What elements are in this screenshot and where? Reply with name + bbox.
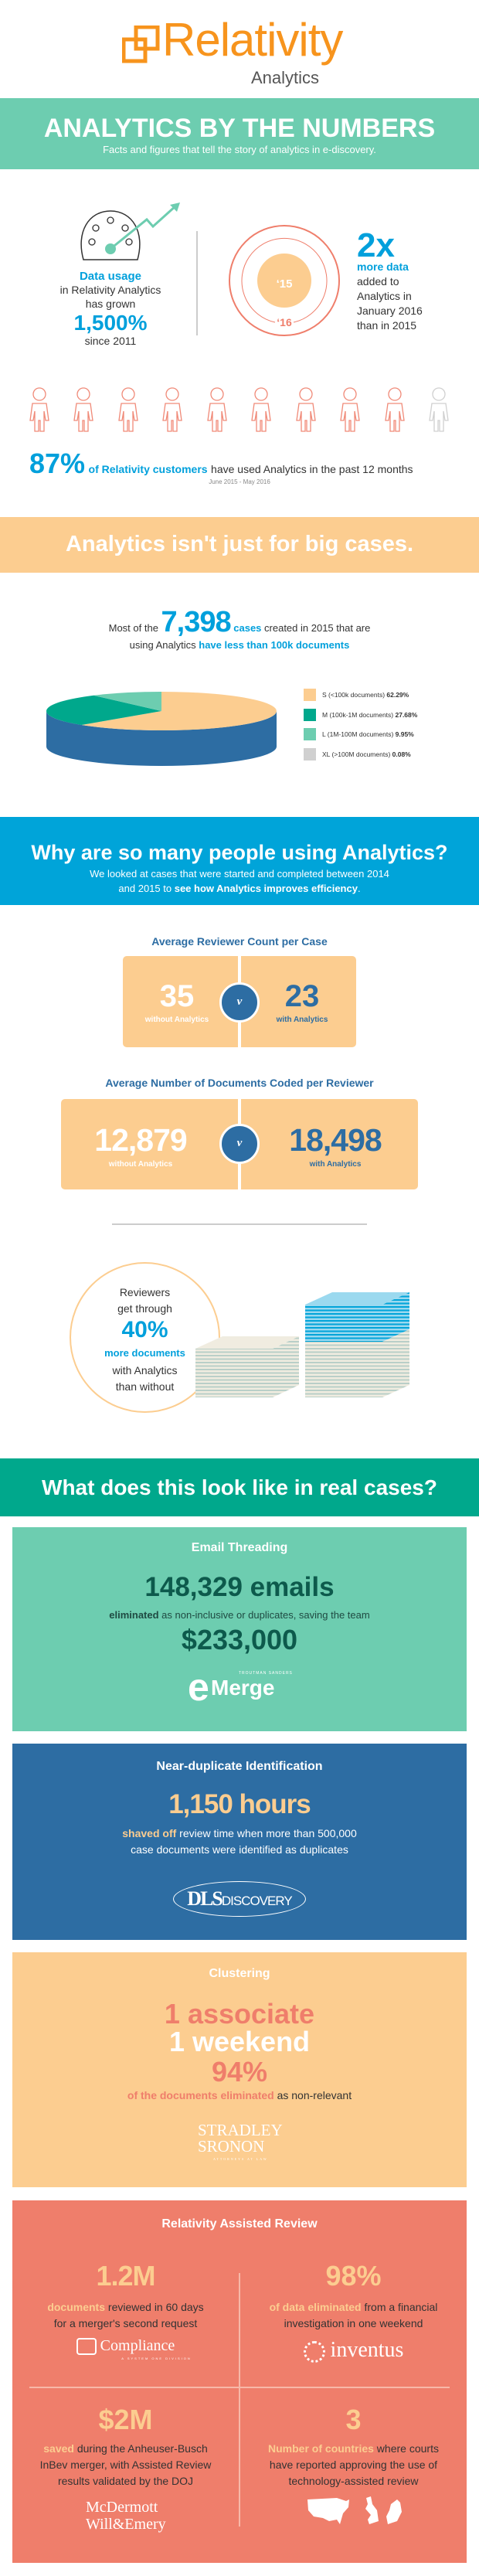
- panel: near-duplicate identification: Near-duplicate Identification: [156, 1760, 323, 1773]
- panel: near-duplicate identification: case documents were identified as duplicates: [131, 1843, 348, 1856]
- logo: Relativity Analytics: Relativity: [162, 14, 342, 66]
- logo: DLS Discovery: [173, 1881, 306, 1917]
- icon: document stacks: [195, 1292, 409, 1397]
- logo: Stradley Ronon: ATTORNEYS AT LAW: [213, 2157, 268, 2161]
- callout: reviewers get through 40% more: [70, 1262, 220, 1413]
- callout: reviewers get through 40% more: with Analytics: [112, 1364, 178, 1376]
- icon: country maps US UK Ireland: [307, 2496, 402, 2524]
- stat: $2M saved: InBev merger, with Assisted Review: [40, 2459, 211, 2471]
- stat: $2M saved: results validated by the DOJ: [58, 2475, 193, 2487]
- logo: DLS Discovery: DLSDISCOVERY: [187, 1887, 292, 1910]
- text: data usage grown 1,500%: since 2011: [85, 335, 136, 347]
- logo: eMerge: [188, 1666, 293, 1709]
- logo: McDermott Will & Emery: Will&Emery: [86, 2516, 166, 2533]
- icon: data circles '15 '16: ‘16: [277, 316, 292, 328]
- stat: 3 countries: [268, 2404, 439, 2524]
- banner: Analytics by the numbers: [0, 98, 479, 169]
- banner: Analytics isn't just for big cases: [0, 517, 479, 573]
- panel: documents coded comparison: with Analytics: [310, 1160, 361, 1169]
- panel: email threading: 148,329 emails: [144, 1572, 335, 1602]
- banner: Why are so many people using Analytics: [0, 817, 479, 905]
- panel: clustering: Clustering: [209, 1967, 270, 1980]
- panel: documents coded comparison: without Analytics: [109, 1160, 172, 1169]
- text: data usage grown 1,500%: has grown: [86, 298, 135, 310]
- logo: Compliance: Compliance: [100, 2337, 175, 2354]
- legend: pie: S (<100k documents) 62.29%: [322, 691, 409, 699]
- stat: 98% data eliminated: investigation in one weekend: [284, 2317, 423, 2329]
- callout: reviewers get through 40% more: than without: [116, 1380, 174, 1393]
- panel: documents coded comparison: 18,498: [289, 1122, 382, 1158]
- panel: reviewer count comparison: 35: [160, 979, 194, 1013]
- stat: 98% data eliminated: [270, 2260, 437, 2363]
- callout: reviewers get through 40% more: get through: [117, 1302, 172, 1315]
- text: data usage grown 1,500%: Data usage: [80, 270, 141, 283]
- banner: Why are so many people using Analytics: We looked at cases that were started and completed between 2014: [90, 868, 389, 880]
- banner: Why are so many people using Analytics: and 2015 to see how Analytics improves efficiency.: [118, 883, 361, 894]
- logo: Stradley Ronon: [198, 2121, 283, 2161]
- icon: versus circle: [219, 982, 260, 1023]
- text: 2x more data: [357, 226, 423, 332]
- stat: 3 countries: technology-assisted review: [288, 2475, 419, 2487]
- icon: logo squares: [122, 26, 159, 63]
- panel: clustering: 1 associate: [165, 1998, 314, 2030]
- stat: 3 countries: Number of countries where courts: [268, 2442, 439, 2455]
- note: date range: June 2015 - May 2016: [209, 478, 270, 485]
- stat: $2M saved: saved during the Anheuser-Busch: [43, 2442, 208, 2455]
- text: 7,398 cases: Most of the 7,398 cases created in 2015 that are: [109, 606, 370, 638]
- logo: Stradley Ronon: SRONON: [198, 2137, 264, 2156]
- stat: $2M saved: $2M: [98, 2404, 153, 2435]
- legend: pie: XL (>100M documents) 0.08%: [322, 750, 411, 758]
- icon: data circles '15 '16: [229, 225, 340, 336]
- text: 2x more data: than in 2015: [357, 319, 416, 332]
- text: 2x more data: January 2016: [357, 305, 423, 317]
- text: 7,398 cases: using Analytics have less than 100k documents: [130, 639, 349, 651]
- banner: Why are so many people using Analytics: Why are so many people using Analytics?: [31, 841, 448, 864]
- panel: relativity assisted review: [12, 2200, 467, 2563]
- text: data usage grown 1,500%: [60, 270, 161, 347]
- text: data usage grown 1,500%: in Relativity Analytics: [60, 284, 161, 296]
- logo: Relativity Analytics: [122, 14, 343, 87]
- panel: reviewer count comparison: [123, 956, 356, 1047]
- panel: clustering: of the documents eliminated as non-relevant: [127, 2089, 352, 2101]
- banner: What does this look like in real cases: [0, 1458, 479, 1516]
- panel: email threading: $233,000: [182, 1624, 297, 1656]
- panel: near-duplicate identification: 1,150 hours: [168, 1789, 311, 1819]
- logo: eMerge: e: [188, 1666, 209, 1709]
- stat: 1.2M documents: for a merger's second request: [54, 2317, 197, 2329]
- panel: clustering: 1 weekend: [169, 2026, 310, 2057]
- stat: 98% data eliminated: 98%: [325, 2260, 382, 2292]
- panel: email threading: eliminated as non-inclusive or duplicates, saving the team: [109, 1609, 370, 1621]
- panel: near-duplicate identification: shaved off review time when more than 500,000: [122, 1827, 357, 1839]
- panel: relativity assisted review: Relativity Assisted Review: [161, 2217, 318, 2231]
- panel: reviewer count comparison: without Analytics: [145, 1016, 209, 1024]
- stat: 1.2M documents: 1.2M: [96, 2260, 155, 2292]
- heading: average documents coded: Average Number of Documents Coded per Reviewer: [105, 1077, 374, 1089]
- panel: email threading: [12, 1527, 467, 1731]
- logo: McDermott Will & Emery: [86, 2499, 166, 2533]
- text: 2x more data: Analytics in: [357, 290, 412, 302]
- panel: documents coded comparison: 12,879: [94, 1122, 187, 1158]
- logo: Stradley Ronon: STRADLEY: [198, 2121, 283, 2139]
- logo: inventus: inventus: [331, 2338, 403, 2362]
- panel: email threading: Email Threading: [192, 1541, 287, 1554]
- panel: clustering: [12, 1952, 467, 2187]
- panel: clustering: 94%: [212, 2056, 267, 2088]
- icon: versus circle: v: [237, 1137, 242, 1149]
- callout: reviewers get through 40% more: 40%: [121, 1317, 168, 1342]
- icon: versus circle: [219, 1124, 260, 1164]
- stat: 98% data eliminated: of data eliminated from a financial: [270, 2301, 437, 2313]
- icon: data circles '15 '16: ‘15: [277, 277, 292, 291]
- legend: pie: M (100k-1M documents) 27.68%: [322, 711, 417, 719]
- callout: reviewers get through 40% more: more documents: [104, 1347, 185, 1359]
- stat: 3 countries: have reported approving the use of: [270, 2459, 437, 2471]
- legend: pie: [304, 689, 417, 761]
- panel: documents coded comparison: [61, 1099, 418, 1189]
- icon row: 10 people: [29, 387, 449, 432]
- legend: pie: L (1M-100M documents) 9.95%: [322, 730, 414, 738]
- stat: $2M saved: [40, 2404, 212, 2533]
- banner: What does this look like in real cases: What does this look like in real cases?: [42, 1475, 437, 1499]
- panel: reviewer count comparison: 23: [285, 979, 319, 1013]
- banner: Analytics by the numbers: ANALYTICS BY THE NUMBERS: [44, 114, 435, 143]
- text: 2x more data: added to: [357, 275, 399, 288]
- icon: versus circle: v: [237, 995, 242, 1008]
- panel: reviewer count comparison: with Analytics: [277, 1016, 328, 1024]
- stat: 3 countries: 3: [345, 2404, 362, 2435]
- text: 2x more data: more data: [357, 260, 409, 273]
- logo: Relativity Analytics: Analytics: [251, 68, 319, 87]
- chart: 3D pie of case sizes: [46, 692, 277, 766]
- heading: average reviewer count: Average Reviewer Count per Case: [151, 935, 328, 948]
- stat: 1.2M documents: [47, 2260, 204, 2360]
- banner: Analytics isn't just for big cases: Analytics isn't just for big cases.: [66, 532, 413, 556]
- logo: eMerge: TROUTMAN SANDERS: [239, 1671, 293, 1676]
- text: 2x more data: 2x: [357, 226, 395, 264]
- stat: 1.2M documents: A SYSTEM ONE DIVISION: [121, 2357, 192, 2360]
- logo: eMerge: Merge: [211, 1676, 274, 1700]
- logo: McDermott Will & Emery: McDermott: [86, 2499, 158, 2516]
- text: data usage grown 1,500%: 1,500%: [74, 311, 147, 335]
- stat: 1.2M documents: documents reviewed in 60 days: [47, 2301, 204, 2313]
- stat: 87% of customers: 87% of Relativity customers have used Analytics in the past 12 months: [29, 447, 413, 479]
- icon: gauge with rising arrow: [80, 202, 180, 260]
- callout: reviewers get through 40% more: Reviewers: [120, 1286, 170, 1298]
- banner: Analytics by the numbers: Facts and figures that tell the story of analytics in e-discovery.: [103, 144, 376, 155]
- panel: near-duplicate identification: [12, 1744, 467, 1940]
